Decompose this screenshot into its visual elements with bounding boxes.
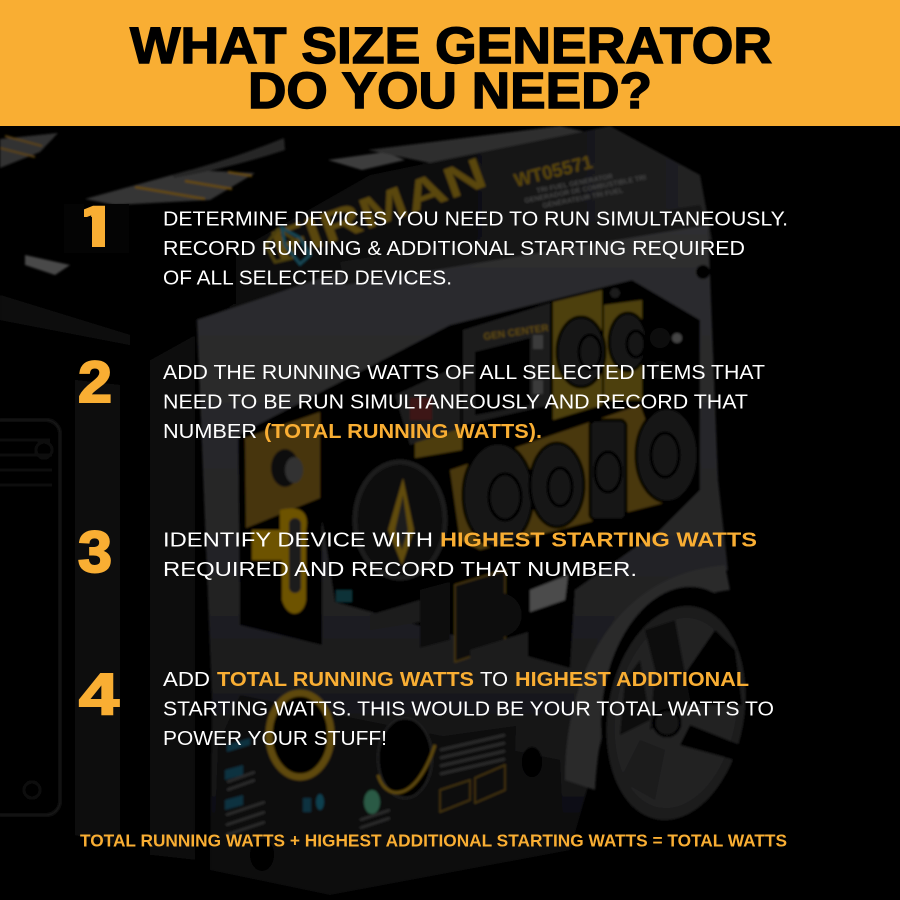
step 4 [79,662,774,750]
title band [0,0,900,126]
firman logo: FIRMAN [265,148,493,271]
number 1 [64,195,129,260]
step 4 text: POWER YOUR STUFF! [163,727,387,750]
upper panel yellow section [245,412,320,614]
step 2 text: ADD THE RUNNING WATTS OF ALL SELECTED ITEMS THAT [163,361,765,384]
lower control panel [215,693,563,880]
step 4 text: TO [480,668,508,691]
fuel selector labels and inset [336,570,568,672]
model description: GÉNÉRATEUR TRI FUEL [542,185,625,210]
yellow outlet plates [450,290,675,550]
title [130,17,772,119]
title: DO YOU NEED? [248,62,652,119]
logo emblem [266,228,310,264]
number 2: 2 [78,350,112,415]
generator lid [150,126,712,320]
gen center control display [395,303,550,458]
step 3 [78,520,757,585]
step 2 [78,350,765,443]
breakers [610,265,710,379]
step 4 text [163,668,774,750]
model description: GENERADOR DE COMBUSTIBLE TRI [524,174,647,205]
left end of generator [0,290,215,900]
step 2 text: NEED TO BE RUN SIMULTANEOUSLY AND RECORD THAT [163,390,748,414]
step 1 text: DETERMINE DEVICES YOU NEED TO RUN SIMULTANEOUSLY. [163,208,788,230]
step 4 text: ADD [163,668,210,691]
formula footer: TOTAL RUNNING WATTS + HIGHEST ADDITIONAL STARTING WATTS = TOTAL WATTS [80,830,787,850]
step 3 text: REQUIRED AND RECORD THAT NUMBER. [163,558,637,581]
step 1 text [163,208,788,290]
gen center control display: GEN CENTER [483,323,550,343]
model number: WT05571 [512,152,595,192]
number 1: 1 [71,195,123,260]
generator photo background [0,126,774,900]
outlets [463,313,698,547]
step 4 text: STARTING WATTS. THIS WOULD BE YOUR TOTAL WATTS TO [163,698,774,720]
step 2 text: (TOTAL RUNNING WATTS). [264,420,542,443]
fender [565,565,730,790]
step 4 text: TOTAL RUNNING WATTS [217,668,474,691]
model description: TRI FUEL GENERATOR [536,173,613,195]
step 4 text: HIGHEST ADDITIONAL [515,668,749,691]
number 4: 4 [79,662,119,727]
wheel spoke gaps [620,620,742,800]
wheel [586,576,774,840]
step 3 text: IDENTIFY DEVICE WITH [163,528,433,552]
step 1 text: OF ALL SELECTED DEVICES. [163,266,452,290]
step 1 [64,195,788,290]
front face [197,225,728,895]
title: WHAT SIZE GENERATOR [130,17,772,74]
panel opening [238,280,700,668]
step 3 text: HIGHEST STARTING WATTS [440,528,757,552]
step 2 text: NUMBER [163,420,257,443]
stickers on top [0,126,612,275]
step 2 text [163,361,765,443]
fuel selector knob [355,462,445,578]
step 3 text [163,528,757,581]
number 3: 3 [78,520,112,585]
step 1 text: RECORD RUNNING & ADDITIONAL STARTING REQUIRED [163,237,745,260]
